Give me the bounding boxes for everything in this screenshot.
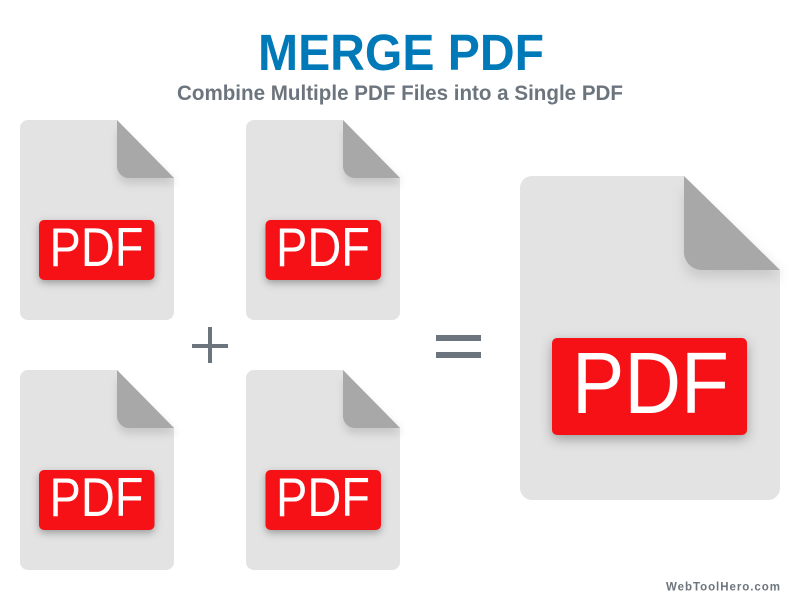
icon: PDF file top middle: PDF <box>276 216 370 278</box>
icon: PDF file top middle <box>246 120 400 320</box>
icon: equals sign <box>436 335 481 358</box>
icon: PDF file bottom middle <box>246 370 400 570</box>
footer credit: WebToolHero.com <box>666 582 780 594</box>
icon: merged PDF file: PDF <box>572 335 729 432</box>
icon: PDF file top left: PDF <box>50 216 144 278</box>
icon: PDF file bottom left: PDF <box>50 466 144 528</box>
icon: PDF file bottom middle: PDF <box>276 466 370 528</box>
icon: merged PDF file <box>520 176 780 500</box>
title: MERGE PDF <box>258 24 544 81</box>
icon: PDF file top left <box>20 120 174 320</box>
subtitle: Combine Multiple PDF Files into a Single PDF <box>177 82 623 105</box>
icon: PDF file bottom left <box>20 370 174 570</box>
icon: plus sign <box>192 327 228 363</box>
